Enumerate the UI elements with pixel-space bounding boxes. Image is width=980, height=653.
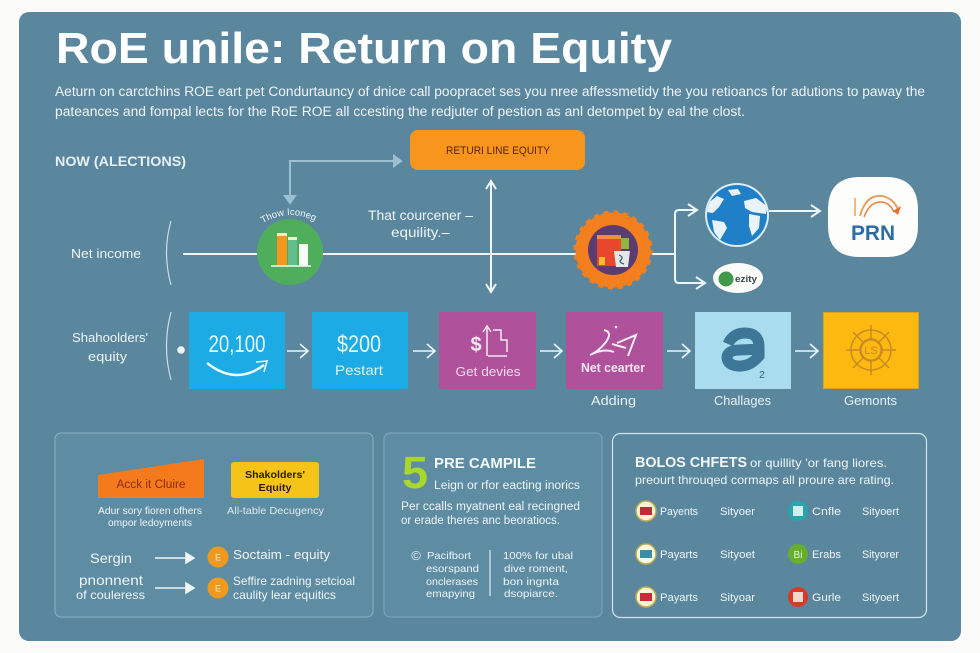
icon: globe <box>704 182 770 248</box>
ratings intro: or quillity 'or fang liores. <box>750 456 887 470</box>
row 1: Sityoer <box>720 506 755 518</box>
row 2: Sityorer <box>862 549 899 561</box>
arrow: feedback to callout <box>285 156 401 203</box>
right terms: caulity lear equitics <box>233 588 336 602</box>
formula caption: That courcener – <box>368 208 473 223</box>
net income flow line <box>183 253 675 255</box>
left terms: pnonnent <box>79 572 143 588</box>
icon: orange bullets <box>208 546 228 598</box>
right column: bon ingnta <box>503 576 559 588</box>
intro text: pateances and fompal lects for the RoE ROE all ccesting the redjuter of pestion as anl detompet by eal the clost. <box>55 104 745 119</box>
left column <box>426 550 479 600</box>
arrow: branch up and down <box>675 204 705 289</box>
panel: example <box>384 433 602 617</box>
arrow <box>287 344 308 358</box>
net income label: Net income <box>71 246 141 261</box>
icon: orange seal badge <box>575 212 651 288</box>
yellow label: Shakolders' <box>245 469 305 481</box>
row 2: Erabs <box>812 549 841 561</box>
card: wheel icon <box>824 312 918 388</box>
double arrow <box>486 181 496 292</box>
icon: ezity oval badge <box>713 263 763 293</box>
left column: emapying <box>426 588 475 600</box>
arrow <box>540 344 562 358</box>
right column: 100% for ubal <box>503 550 573 562</box>
row 3: Gurle <box>812 592 841 604</box>
yellow label: Equity <box>258 482 292 494</box>
example text <box>401 480 580 527</box>
yellow label <box>231 462 319 498</box>
example heading: PRE CAMPILE <box>434 456 536 472</box>
callout: return line equity: RETURI LINE EQUITY <box>446 145 551 157</box>
card: $200: Pestart <box>335 362 383 378</box>
left terms: Sergin <box>90 550 132 566</box>
left column: esorspand <box>426 563 479 575</box>
card: get devies <box>439 312 536 389</box>
orange wedge label <box>98 459 204 498</box>
bullet dot <box>177 346 185 354</box>
row 1: Payents <box>660 506 698 518</box>
icon: PRN logo card: PRN <box>851 222 895 245</box>
arrow <box>413 344 435 358</box>
card: 20,100 <box>189 312 285 389</box>
icon: orange bullets: E <box>215 552 221 562</box>
callout: return line equity <box>410 130 585 170</box>
shareholders equity label: equity <box>88 350 128 364</box>
arrow <box>795 344 818 358</box>
card: 20,100: 20,100 <box>208 331 266 358</box>
arrows <box>155 553 194 593</box>
icon: ezity oval badge: ezity <box>735 274 758 285</box>
right terms <box>233 547 355 602</box>
wedge description <box>98 505 202 529</box>
intro text <box>55 84 925 119</box>
arrow: globe to PRN <box>769 205 820 217</box>
bracket: equity <box>166 312 171 380</box>
yellow description: All-table Decugency <box>227 505 325 517</box>
right terms: Soctaim - equity <box>233 547 331 562</box>
label: challages: Challages <box>714 393 771 408</box>
left column: onclerases <box>426 576 478 588</box>
card: $200 <box>312 312 408 389</box>
icon: orange bullets: E <box>215 584 221 594</box>
panel: left comparison <box>55 433 373 617</box>
card: challenge icon <box>695 312 791 389</box>
shareholders equity label: Shahoolders' <box>72 331 148 345</box>
card: challenge icon: 2 <box>759 369 765 381</box>
card: get devies: Get devies <box>456 364 521 379</box>
wedge description: Adur sory fioren ofhers <box>98 505 202 517</box>
row 3 <box>636 587 899 607</box>
row 3: Sityoar <box>720 592 755 604</box>
right column <box>503 550 573 600</box>
right terms: Seffire zadning setcioal <box>233 574 355 588</box>
row 1 <box>636 501 899 521</box>
right column: dsopiarce. <box>504 588 558 600</box>
icon: bar chart in green circle <box>257 219 323 285</box>
card: net cearter: Net cearter <box>581 361 645 375</box>
formula caption: equility.– <box>391 225 451 240</box>
panel: ratings <box>612 434 926 618</box>
left column: Pacifbort <box>427 550 471 562</box>
row 2: Payarts <box>660 549 699 561</box>
ratings intro: preourt throuqed cormaps all proure are rating. <box>635 473 894 487</box>
title: RoE unile: Return on Equity <box>56 24 673 73</box>
intro text: Aeturn on carctchins ROE eart pet Condurtauncy of dnice call poopracet ses you nree affessmetidy the you retioancs for adutions to paway the <box>55 84 925 99</box>
wedge description: ompor ledoyments <box>108 517 192 529</box>
row 3: Payarts <box>660 592 699 604</box>
row 2: Sityoet <box>720 549 755 561</box>
section label: NOW (ALECTIONS) <box>55 153 186 169</box>
orange wedge label: Acck it Cluire <box>116 479 186 491</box>
row 2 <box>636 544 899 564</box>
card: wheel icon: LS <box>864 345 878 357</box>
ratings heading: BOLOS CHFETS <box>635 455 747 471</box>
label: gemonts: Gemonts <box>844 393 897 408</box>
bracket: net income <box>166 221 171 285</box>
big numeral: 5 <box>402 447 428 498</box>
example text: Per ccalls myatnent eal recingned <box>401 501 580 513</box>
row 1: Cnfle <box>812 506 841 518</box>
example text: Leign or rfor eacting inorics <box>434 480 580 492</box>
card: net cearter <box>566 312 663 389</box>
example text: or erade theres anc beoratiocs. <box>401 515 560 527</box>
right column: dive roment, <box>504 563 568 575</box>
row 1: Sityoert <box>862 506 899 518</box>
formula caption <box>368 208 473 240</box>
left terms <box>76 550 145 602</box>
label: adding: Adding <box>591 393 636 408</box>
card: get devies: $ <box>470 334 482 356</box>
arrow <box>667 344 690 358</box>
icon: PRN logo card <box>828 177 918 257</box>
row 2: Bi <box>794 550 802 561</box>
shareholders equity label <box>72 331 148 364</box>
curved icon caption: Thow Iconeg <box>260 208 316 222</box>
card: $200: $200 <box>337 331 381 358</box>
ratings intro <box>635 456 894 487</box>
left terms: of couleress <box>76 588 145 602</box>
row 3: Sityoert <box>862 592 899 604</box>
icon: copyright mark: © <box>411 548 421 563</box>
